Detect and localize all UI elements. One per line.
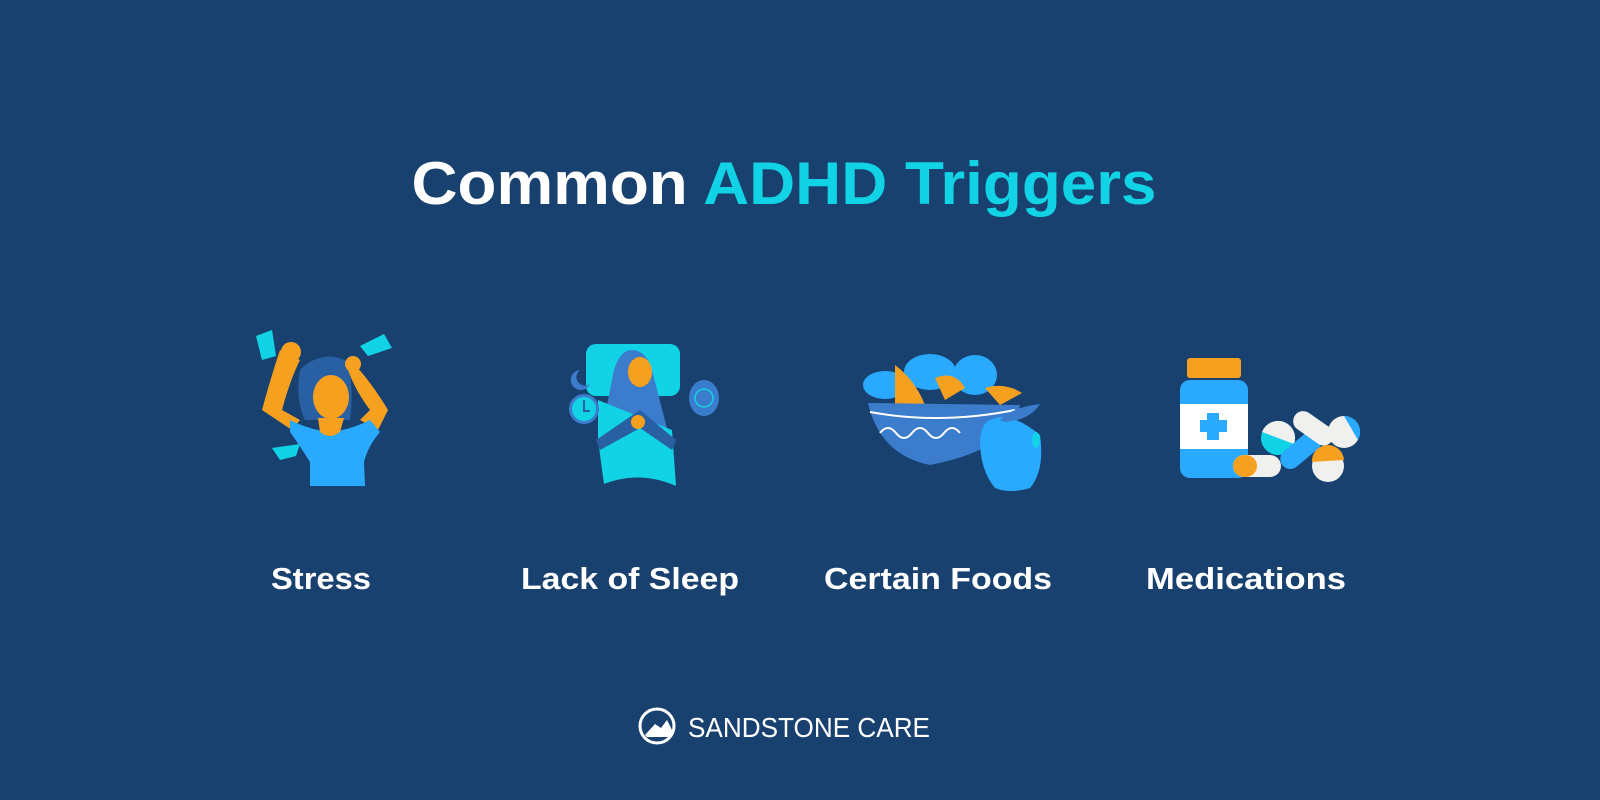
icon: stress: [256, 330, 392, 486]
label: stress: Stress: [271, 561, 371, 596]
icon: medications: [1180, 358, 1360, 482]
label: medications: Medications: [1146, 561, 1346, 596]
logo: SANDSTONE CARE: [688, 712, 930, 743]
label: certain foods: Certain Foods: [824, 561, 1052, 596]
icon: certain foods: [863, 354, 1041, 491]
label: lack of sleep: Lack of Sleep: [521, 561, 739, 596]
title: Common ADHD Triggers: [412, 150, 1156, 217]
icon: lack of sleep: [569, 344, 719, 486]
